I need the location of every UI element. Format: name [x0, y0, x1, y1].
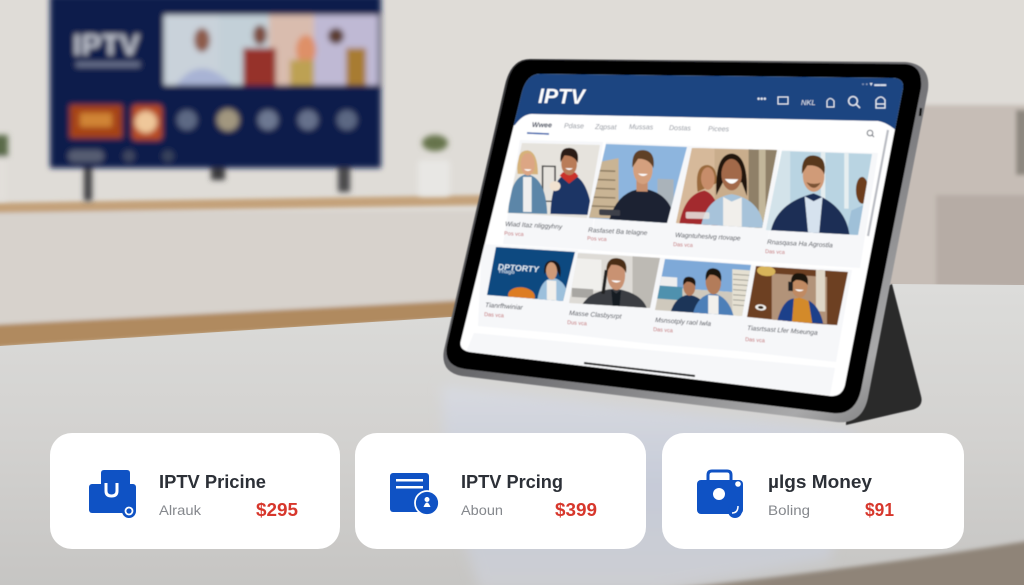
- header menu icons: [757, 94, 885, 108]
- thumbnail prices: Pos vca: [504, 231, 525, 238]
- app header: [513, 73, 904, 130]
- thumbnail prices: Das vca: [673, 242, 694, 249]
- thumbnail captions: Wiad Itaz nliggyhny: [505, 221, 563, 231]
- pricing card 3: [662, 433, 964, 549]
- thumbnail prices: [484, 231, 786, 344]
- thumbnail 2: [588, 144, 688, 224]
- thumbnail prices: Das vca: [765, 249, 786, 256]
- potted plants: [0, 135, 450, 200]
- category tabs: Picees: [708, 126, 730, 133]
- sideboard: [0, 195, 490, 348]
- status icons: ▫ ▫ ▾ ▬▬: [862, 82, 886, 88]
- home indicator: [584, 363, 695, 376]
- pricing card 1: [50, 433, 340, 549]
- category tabs: Mussas: [629, 124, 654, 131]
- thumbnail prices: Das vca: [745, 337, 766, 344]
- thumbnail 3: [676, 148, 778, 228]
- table top: [0, 284, 1024, 585]
- header menu icons: NKL: [801, 98, 816, 107]
- thumbnail prices: Pos vca: [587, 236, 608, 243]
- scrollbar: [868, 130, 888, 236]
- price: $91: [865, 499, 894, 520]
- television: IPTV: [73, 29, 140, 62]
- side button: [920, 108, 921, 116]
- blurred living room background: [0, 0, 1024, 350]
- tab search icon: [867, 130, 874, 137]
- thumbnail 1: [507, 143, 600, 218]
- thumbnail captions: Rasfaset Ba telagne: [588, 227, 648, 237]
- category tabs: [527, 122, 730, 134]
- thumbnail captions: Masse Clasbysrpt: [569, 310, 623, 321]
- thumbnail captions: Tiasrtsast Lfer Mseunga: [747, 325, 818, 337]
- pricing card 2: [355, 433, 646, 549]
- label: Alrauk: [159, 502, 202, 518]
- tablet bezel: [446, 60, 921, 413]
- thumbnail prices: Das vca: [484, 312, 505, 319]
- television: [50, 0, 381, 201]
- active tab underline: [527, 133, 549, 134]
- thumbnail 6: [569, 252, 660, 308]
- tablet screen: [460, 73, 904, 398]
- title: IPTV Pricine: [159, 471, 266, 492]
- tablet stand: [846, 284, 922, 425]
- thumbnail prices: Dus vca: [567, 320, 588, 327]
- thumbnail captions: Tianrfhwiniar: [485, 302, 524, 312]
- app logo: IPTV: [538, 85, 587, 109]
- thumbnail captions: Msnsotply raol Iwla: [655, 317, 712, 328]
- title: IPTV Prcing: [461, 471, 563, 492]
- price: $399: [555, 499, 597, 520]
- category tabs: Wwee: [532, 122, 552, 129]
- thumbnail 7: [654, 258, 752, 316]
- thumbnail 5: Yhago: [498, 269, 515, 276]
- label: Aboun: [461, 502, 503, 518]
- tablet metal edge: [443, 59, 928, 422]
- thumbnail prices: Das vca: [653, 327, 674, 334]
- thumbnail captions: Rnasqasa Ha Agrostla: [767, 239, 833, 249]
- card panels: [466, 140, 878, 395]
- label: Boling: [768, 502, 810, 518]
- category tabs: Zqpsat: [594, 124, 618, 131]
- category tabs: Dostas: [669, 125, 691, 132]
- icon: card with user badge: [390, 473, 439, 515]
- thumbnail captions: Wagntuheslvg rtovape: [675, 232, 741, 242]
- tablet reflection: [442, 385, 855, 585]
- thumbnail 5: DPTORTY: [498, 262, 540, 274]
- category tabs: Pdase: [564, 123, 584, 130]
- tablet: [440, 59, 928, 422]
- wood table edge: [650, 540, 1024, 585]
- thumbnail 5: [486, 246, 576, 302]
- icon: wallet bag: [89, 470, 136, 518]
- sofa: [880, 105, 1024, 290]
- thumbnail captions: [485, 221, 833, 337]
- icon: camera case: [697, 471, 743, 518]
- title: µlgs Money: [768, 471, 873, 492]
- price: $295: [256, 499, 298, 520]
- thumbnail 4: [766, 150, 872, 236]
- thumbnail 8: [746, 265, 848, 326]
- header menu icons: •••: [757, 94, 766, 104]
